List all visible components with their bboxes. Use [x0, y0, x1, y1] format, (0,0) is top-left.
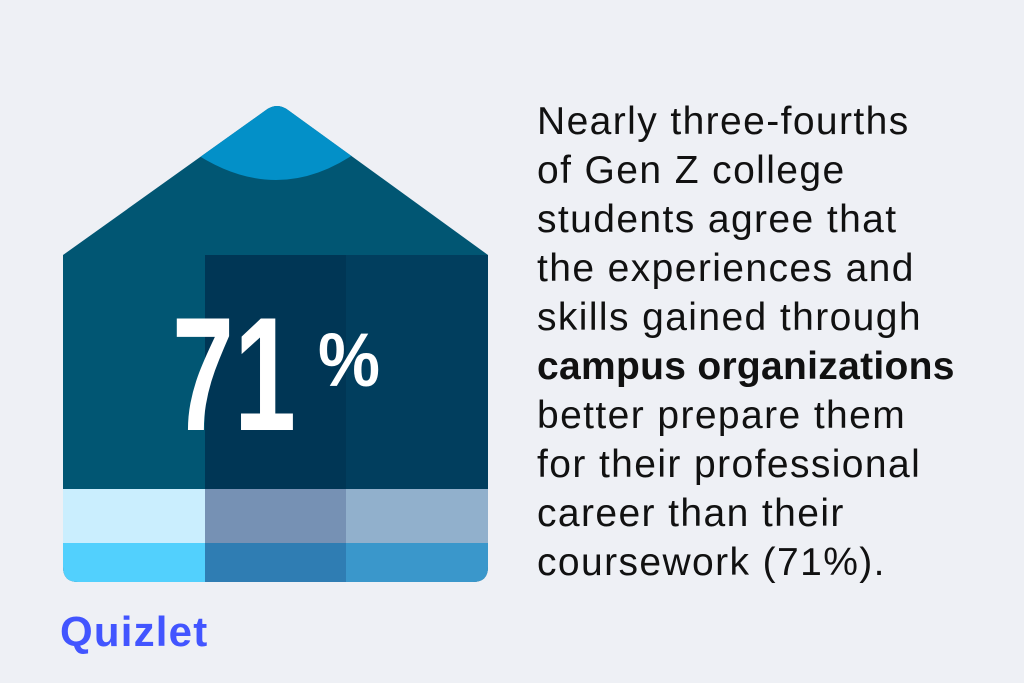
stat: 71%: %: [318, 318, 380, 403]
body text: Nearly three-fourths: [537, 100, 910, 143]
body text: coursework (71%).: [537, 541, 886, 584]
body text: career than their: [537, 492, 845, 535]
body text: of Gen Z college: [537, 149, 846, 192]
logo: Quizlet: Quizlet: [60, 608, 208, 655]
pencil graphic: [63, 106, 488, 582]
body text: students agree that: [537, 198, 898, 241]
body text: campus organizations: [537, 345, 955, 388]
body text: for their professional: [537, 443, 921, 486]
stat: 71%: 71: [172, 284, 296, 465]
body text: the experiences and: [537, 247, 915, 290]
body text: [537, 100, 955, 584]
body text: skills gained through: [537, 296, 922, 339]
body text: better prepare them: [537, 394, 906, 437]
